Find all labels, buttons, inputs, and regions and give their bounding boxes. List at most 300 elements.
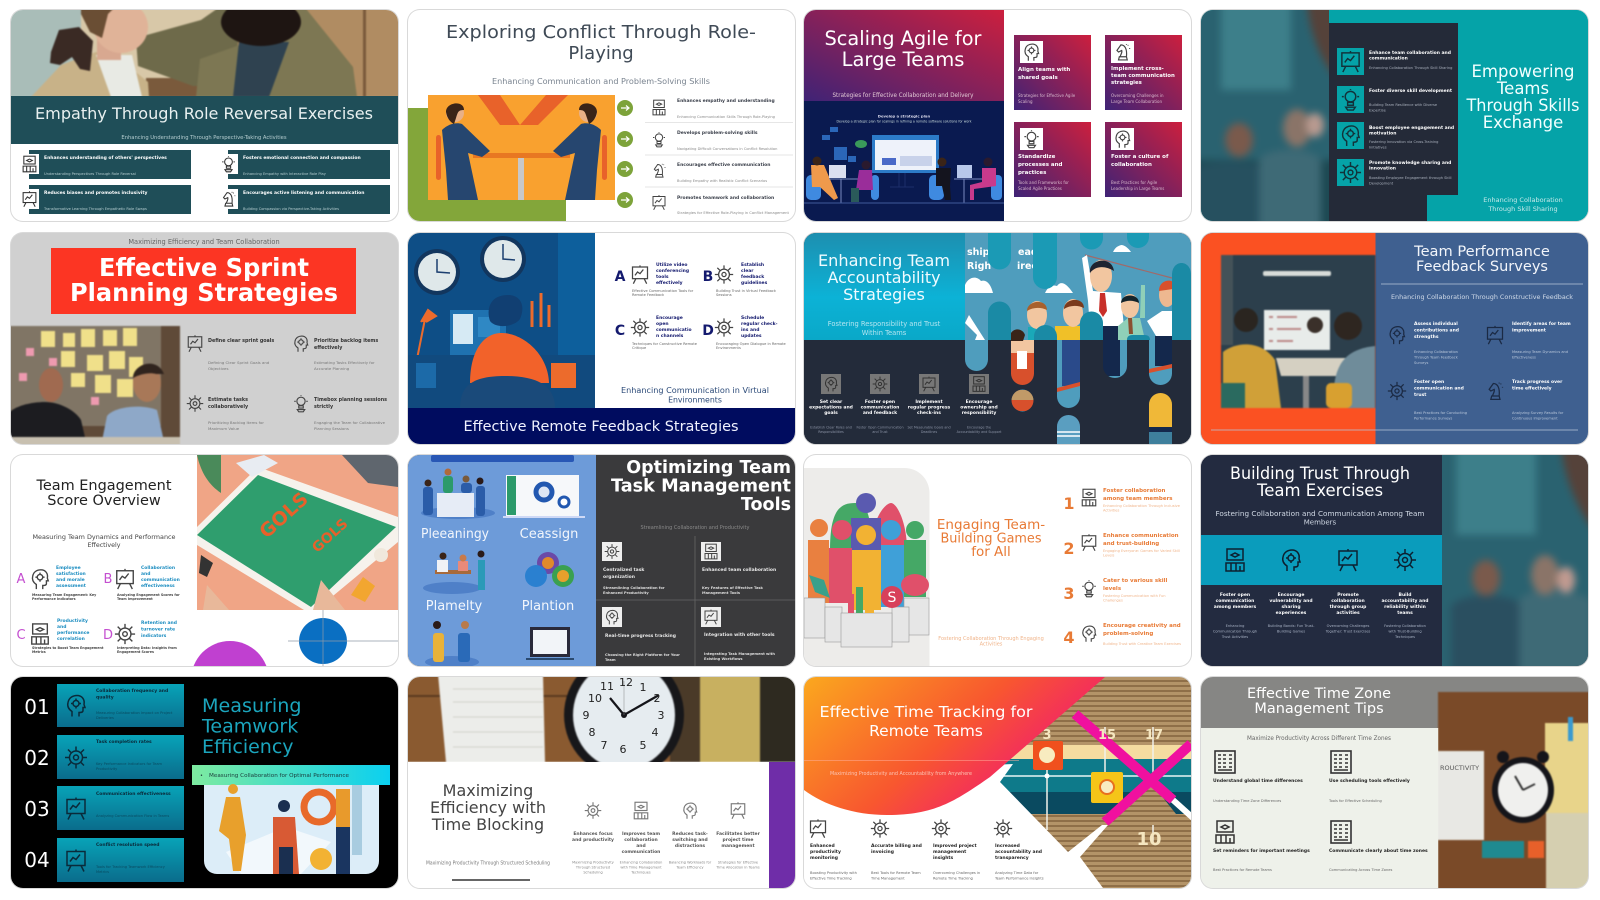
item 1: [1063, 488, 1181, 513]
photo: two people, comforting hand on shoulder: [7, 0, 402, 97]
photo: timeline board on wood: 17: [1145, 728, 1163, 743]
item 3: [1337, 122, 1454, 150]
illustration: strategic plan meeting: Develop a strategic plan for scalings in refining a remote software solutions for work: [837, 120, 972, 124]
photo: timeline board on wood: [990, 677, 1193, 888]
purple bar: [768, 762, 794, 888]
item 1: Understanding Perspectives Through Role Reversal: [44, 172, 136, 176]
item 4: accountability and: [995, 849, 1042, 855]
item 3: Best Practices for Conducting: [1414, 410, 1467, 414]
item 2: Accurate Planning: [314, 366, 350, 370]
illustration: celebrating team through pill-shaped windows: irect: [1017, 260, 1042, 272]
item 1: Through Team Feedback: [1413, 355, 1459, 359]
item 3: [907, 374, 951, 434]
benefit list: Develops problem-solving skills: [676, 130, 757, 136]
item 1: Enhancing Collaboration Through Skill Sharing: [1369, 66, 1452, 70]
item 1: Scheduling: [583, 870, 602, 874]
item 4: Accountability and Support: [957, 430, 1002, 434]
item 4: Communicate clearly about time zones: [1329, 848, 1428, 854]
item 1: Foster collaboration: [1103, 488, 1166, 494]
title: Score Overview: [47, 493, 161, 509]
item 2: Measuring Team Dynamics and: [1512, 350, 1568, 354]
item 4: Boosting Employee Engagement through Skill: [1369, 176, 1451, 180]
item 4: strictly: [314, 404, 334, 410]
item 3: collaboration: [1331, 598, 1365, 604]
item 4: time effectively: [1512, 385, 1552, 391]
item 2: Tools for Effective Scheduling: [1328, 799, 1382, 803]
item 2: Enhancing Empathy with Interactive Role Play: [243, 172, 327, 176]
item 4: Building Compassion via Perspective-Taking Activities: [243, 207, 339, 211]
item 2: Time Management: [870, 876, 905, 880]
item B: effectiveness: [141, 583, 175, 589]
grid lines: [596, 536, 794, 666]
title: Planning Strategies: [70, 278, 338, 306]
item D: ins and: [740, 326, 759, 332]
item 4: [700, 607, 775, 661]
rising teal pills: [988, 262, 1191, 340]
title: Remote Teams: [869, 722, 983, 740]
item 03: Analyzing Communication Flow in Teams: [96, 814, 169, 818]
item 2: [700, 542, 776, 595]
item 2: Effectiveness: [1512, 355, 1536, 359]
panel: Engaging Team-Building Games for All: [804, 455, 1191, 666]
item 3: management: [933, 849, 967, 855]
item 4: Development: [1369, 182, 1394, 186]
illustration: analysts with target chart: [204, 784, 379, 874]
title: Exchange: [1483, 113, 1563, 132]
item C: Metrics: [32, 650, 46, 654]
item B: Team Improvement: [117, 597, 153, 601]
arrows: [616, 100, 632, 208]
illustration: goals board on a desk: [197, 455, 398, 610]
item 4: [1489, 378, 1564, 420]
item D: Schedule: [740, 314, 764, 320]
title band: [408, 408, 794, 444]
item 4: [1337, 159, 1451, 186]
item 02: [24, 735, 184, 779]
item 2: communication: [621, 849, 660, 855]
item 4: Increased: [995, 843, 1020, 849]
item 1: Communication Through: [1213, 630, 1257, 634]
item 4: Encourages active listening and communication: [243, 190, 364, 196]
item 1: Through Structured: [574, 866, 610, 870]
item 1: [1337, 48, 1452, 75]
item 4: [1063, 623, 1181, 647]
subtitle: Activities: [980, 642, 1003, 648]
item 2: [295, 336, 378, 370]
item 2: improvement: [1512, 327, 1547, 333]
item 2: Accurate billing and: [871, 843, 922, 849]
title: for All: [971, 544, 1011, 560]
illustration: strategic plan meeting: [804, 101, 1004, 221]
tile 4: Leadership in Large Teams: [1111, 186, 1164, 191]
blurred business photo: [1181, 0, 1351, 240]
item B: Establish: [740, 262, 764, 268]
item C: performance: [57, 630, 89, 636]
item 2: 2: [1063, 539, 1075, 558]
item 3: Set reminders for important meetings: [1213, 848, 1310, 854]
title: Building Trust Through: [1230, 464, 1410, 483]
item 3: Best Practices for Remote Teams: [1213, 868, 1272, 872]
item A: assessment: [56, 583, 87, 589]
title: Large Teams: [842, 48, 964, 71]
subtitle: Fostering Collaboration and Communication Among Team: [1216, 510, 1425, 518]
item 1: 1: [1063, 494, 1075, 513]
item A: [614, 262, 693, 296]
item B: Collaboration: [141, 565, 175, 571]
title: Team Exercises: [1256, 481, 1383, 500]
item D: [702, 314, 786, 350]
item B: [702, 262, 776, 296]
title: Optimizing Team: [626, 458, 790, 478]
item A: A: [614, 268, 625, 284]
subtitle: Enhancing Communication in Virtual: [620, 386, 768, 394]
item 2: Enhance communication: [1103, 533, 1179, 539]
item 1: [1213, 549, 1257, 639]
item 4: [219, 185, 390, 214]
item 3: Overcoming Challenges in: [933, 871, 980, 875]
item D: updates: [740, 332, 761, 338]
title band: [11, 96, 398, 144]
item 1: Centralized task: [602, 567, 645, 573]
benefit list: [644, 98, 792, 215]
item 3: communication and: [1414, 385, 1464, 391]
illustration: celebrating team through pill-shaped windows: Righ: [967, 260, 991, 272]
item A: A: [17, 572, 26, 587]
item 3: Maximum Value: [208, 426, 240, 430]
item 2: Techniques: [630, 870, 650, 874]
dark content block: [1201, 455, 1442, 666]
item B: [104, 565, 180, 601]
item 4: [715, 802, 760, 870]
title: Exploring Conflict Through Role-: [446, 22, 756, 43]
item 3: Deadlines: [921, 430, 937, 434]
item 3: Fostering Communication with Fun: [1103, 594, 1165, 598]
subtitle: Fostering Collaboration Through Engaging: [938, 636, 1044, 642]
item C: Critique: [632, 346, 646, 350]
item B: Building Trust in Virtual Feedback: [716, 288, 776, 292]
subtitle: Measuring Team Dynamics and Performance: [32, 534, 176, 541]
tile 4: [1105, 122, 1182, 197]
clock hands and numerals: 11: [600, 680, 614, 693]
tile 1: Scaling: [1018, 99, 1033, 104]
benefit list: Strategies for Effective Role-Playing in Conflict Management: [676, 211, 789, 215]
item 1: productivity: [810, 849, 841, 855]
item 3: through group: [1330, 604, 1367, 610]
item D: Environments: [716, 346, 740, 350]
item B: B: [702, 268, 713, 284]
item 1: monitoring: [810, 855, 838, 861]
item 1: [20, 150, 191, 179]
photo: sticky note wall and two men: [8, 326, 180, 446]
title: Effective Remote Feedback Strategies: [463, 418, 738, 434]
item 1: Boosting Productivity with: [810, 871, 857, 875]
item 1: [809, 374, 853, 434]
teal background block: [1329, 10, 1588, 221]
dark clean edge for photo: [1201, 728, 1438, 888]
item 3: Improved project: [933, 843, 977, 849]
item 3: Promote: [1337, 592, 1359, 598]
item 2: Management Tools: [702, 591, 740, 595]
item C: communicatio: [656, 326, 691, 332]
clock hands and numerals: 5: [639, 739, 646, 752]
benefit list: Navigating Difficult Conversations in Conflict Resolution: [676, 147, 777, 151]
subtitle: Streamlining Collaboration and Productivity: [640, 525, 749, 531]
tile 4: Best Practices for Agile: [1111, 180, 1158, 185]
clock hands and numerals: 9: [582, 709, 589, 722]
item 1: [188, 335, 274, 370]
panel: Empathy Through Role Reversal Exercises: [11, 10, 398, 221]
item 02: Productivity: [96, 767, 118, 771]
item 3: regular progress: [908, 404, 951, 410]
item 1: Understanding Time Zone Differences: [1213, 799, 1281, 803]
item 3: Reduces biases and promotes inclusivity: [44, 190, 147, 196]
item 3: [187, 395, 264, 430]
top pills: [988, 232, 1149, 288]
illustration: goals board on a desk: GOLS: [309, 516, 351, 556]
item B: feedback: [740, 274, 765, 280]
item 3: Overcoming Challenges: [1327, 624, 1370, 628]
title: Efficiency: [202, 736, 294, 758]
item 4: [994, 819, 1044, 880]
illustration panel: Plantion: [521, 599, 574, 614]
item B: Analyzing Engagement Scores for: [117, 593, 180, 597]
item A: Employee: [56, 565, 81, 571]
item 1: Activities: [1103, 508, 1120, 512]
tile 3: Tools and Frameworks for: [1017, 180, 1069, 185]
header block: [804, 232, 965, 340]
item D: turnover rate: [141, 626, 175, 632]
underline: [452, 879, 530, 881]
item 2: Use scheduling tools effectively: [1329, 778, 1410, 784]
item D: Engagement Scores: [117, 650, 154, 654]
item 2: [1328, 751, 1410, 803]
item 1: Assess individual: [1414, 320, 1458, 326]
title: Accountability: [828, 268, 940, 286]
item 2: Levels: [1103, 554, 1114, 558]
item C: C: [16, 628, 26, 643]
item 1: Trust Activities: [1221, 635, 1248, 639]
subtitle: Maximizing Productivity Through Structured Scheduling: [426, 860, 550, 866]
item 1: among team members: [1103, 496, 1173, 502]
item 2: Foster Open Communication: [856, 425, 904, 429]
item 4: Building Trust with Creative Team Exercises: [1103, 642, 1181, 646]
clock hands and numerals: 3: [657, 709, 664, 722]
item 2: Enhancing Collaboration: [619, 860, 662, 864]
item 2: Expertise: [1369, 108, 1387, 112]
item 1: Define clear sprint goals: [208, 338, 274, 344]
item 1: expectations and: [809, 404, 853, 410]
clock hands and numerals: 7: [600, 739, 607, 752]
item 2: Building Bonds: Fun Trust-: [1268, 624, 1315, 628]
item A: Remote Feedback: [632, 292, 665, 296]
item 02: 02: [24, 746, 50, 770]
photo: clock and notepad on wood: [404, 653, 798, 777]
item A: effectively: [656, 280, 682, 286]
item 4: responsibility: [962, 410, 996, 416]
item 1: strengths: [1414, 334, 1439, 340]
title: Empathy Through Role Reversal Exercises: [35, 104, 373, 123]
item 2: [219, 150, 390, 179]
header block: [804, 10, 1004, 101]
illustration panel: Ceassign: [519, 527, 578, 542]
benefit list: Enhances empathy and understanding: [676, 98, 774, 104]
item 04: 04: [24, 848, 50, 872]
item 02: Key Performance Indicators for Team: [96, 762, 163, 766]
item D: D: [103, 628, 113, 643]
subtitle: Members: [1304, 518, 1337, 526]
photo: alarm clock on wood desk: [1438, 692, 1591, 891]
item A: [17, 565, 97, 601]
item 2: Building Team Resilience with Diverse: [1369, 103, 1438, 107]
item 1: communication: [1369, 56, 1408, 62]
item A: Performance Indicators: [32, 597, 76, 601]
title: Scaling Agile for: [824, 27, 982, 50]
subtitle: Enhancing Collaboration Through Constructive Feedback: [1391, 292, 1573, 300]
item 1: Enhancing: [1226, 624, 1244, 628]
panel: Team Engagement Score Overview: [11, 455, 398, 666]
item 2: effectively: [314, 344, 343, 350]
gray header: [1201, 677, 1588, 728]
item B: B: [104, 572, 112, 587]
item 2: experiences: [1276, 610, 1307, 616]
photo caption text: ROUCTIVITY: [1440, 764, 1479, 772]
item C: correlation: [57, 636, 85, 642]
item 4: Track progress over: [1512, 378, 1563, 384]
item D: [103, 620, 177, 654]
illustration: remote worker at desk: [408, 232, 594, 408]
title: Task Management: [610, 476, 790, 496]
item 3: Initiatives: [1369, 146, 1387, 150]
item 4: Fostering Collaboration: [1384, 624, 1426, 628]
item 4: Facilitates better: [716, 831, 760, 837]
item 4: Planning Sessions: [314, 426, 349, 430]
photo: timeline board on wood: 10: [1136, 829, 1162, 850]
item 4: with Trust-Building: [1388, 630, 1422, 634]
photo: timeline board on wood: 3: [1042, 728, 1052, 743]
item 2: [870, 819, 922, 880]
item 4: transparency: [995, 855, 1029, 861]
item 3: Challenges: [1103, 598, 1123, 602]
illustration: celebrating team through pill-shaped windows: ead T: [1018, 246, 1048, 258]
tile 4: collaboration: [1111, 162, 1152, 168]
item 2: Engaging Everyone: Games for Varied Skill: [1103, 549, 1180, 553]
photo: timeline board on wood: 15: [1098, 728, 1116, 743]
item 4: Engaging the Team for Collaborative: [314, 420, 386, 424]
item 2: Foster open: [865, 398, 895, 404]
item 4: ownership and: [960, 404, 998, 410]
item 4: Time Allocation in Teams: [715, 866, 759, 870]
item 1: [1213, 751, 1303, 803]
item 01: Deliveries: [96, 716, 114, 720]
item 4: Continuous Improvement: [1512, 416, 1558, 420]
item 1: Foster open: [1220, 592, 1250, 598]
item B: guidelines: [740, 280, 767, 286]
item 3: [1388, 378, 1467, 420]
subtitle bar: [192, 765, 390, 785]
clock hands and numerals: 10: [588, 692, 602, 705]
item 3: Team: [604, 658, 615, 662]
item 3: Choosing the Right Platform for Your: [604, 653, 680, 657]
item 1: Responsibilities: [818, 430, 844, 434]
green block: [408, 108, 566, 221]
subtitle: Strategies for Effective Collaboration and Delivery: [832, 91, 974, 99]
item 3: Boost employee engagement and: [1369, 125, 1454, 131]
title: Team Performance: [1413, 242, 1550, 260]
item 3: switching and: [672, 837, 707, 843]
item 4: Integrating Task Management with: [704, 652, 775, 656]
item A: and morale: [56, 577, 85, 583]
item 3: Implement: [915, 398, 943, 404]
item 4: teams: [1397, 610, 1413, 616]
item 4: Analyzing Time Data for: [995, 871, 1039, 875]
item 3: Cater to various skill: [1103, 578, 1168, 584]
illustration: colorful figures on podiums: S: [888, 590, 897, 606]
orange block: [1201, 232, 1376, 444]
tile 2: Implement cross-: [1111, 66, 1164, 72]
item 03: 03: [24, 797, 50, 821]
title: Maximizing: [442, 781, 533, 800]
title: Effective Time Tracking for: [820, 703, 1033, 721]
illustration: colorful figures on podiums: [804, 468, 930, 666]
item 3: [1325, 549, 1370, 634]
item 3: check-ins: [917, 410, 941, 416]
item 1: Maximizing Productivity: [572, 860, 613, 864]
item 3: collaboratively: [208, 404, 249, 410]
item C: Techniques for Constructive Remote: [630, 342, 697, 346]
red banner: [51, 248, 356, 314]
item 3: [932, 819, 980, 880]
illustration panel: Pleeaningy: [420, 527, 489, 542]
item 1: goals: [824, 410, 838, 416]
item 4: accountability and: [1381, 598, 1429, 604]
tile 1: Strategies for Effective Agile: [1018, 93, 1076, 98]
item 3: Real-time progress tracking: [604, 633, 675, 639]
item 3: Estimate tasks: [208, 396, 248, 402]
panel: Building Trust Through Team Exercises: [1201, 455, 1588, 666]
photo: meeting room: [1221, 254, 1376, 408]
title: Building Games: [940, 530, 1042, 546]
item 3: Performance Surveys: [1414, 416, 1452, 420]
item A: satisfaction: [56, 571, 86, 577]
item 1: Set clear: [820, 398, 843, 404]
item 4: management: [721, 843, 755, 849]
panel: Effective Time Zone Management Tips: [1201, 677, 1588, 888]
title: Feedback Surveys: [1416, 258, 1548, 274]
item 2: vulnerability and: [1269, 598, 1313, 604]
item D: Encouraging Open Dialogue in Remote: [716, 342, 786, 346]
tile 2: [1105, 35, 1182, 110]
panel: Optimizing Team Task Management Tools: [408, 455, 794, 666]
blue circle: [299, 618, 347, 664]
tile 2: strategies: [1111, 80, 1142, 86]
item 2: and Trust: [872, 430, 888, 434]
item 1: [602, 542, 664, 595]
item 1: Enhanced: [810, 843, 835, 849]
item 1: contributions and: [1414, 327, 1459, 333]
clock hands and numerals: [582, 676, 664, 756]
item 4: Encourage creativity and: [1103, 623, 1181, 629]
item 4: Encourage the: [967, 425, 991, 429]
divider lines: [1211, 284, 1583, 430]
item 1: Enhancing Collaboration: [1414, 350, 1458, 354]
item 4: innovation: [1369, 166, 1396, 172]
item 3: [20, 185, 191, 214]
item 4: Communicating Across Time Zones: [1329, 868, 1392, 872]
subtitle: Enhancing Understanding Through Perspective-Taking Activities: [121, 135, 287, 141]
title: Effective Time Zone: [1247, 686, 1391, 702]
item 4: Team Performance Insights: [994, 876, 1044, 880]
item 3: levels: [1103, 586, 1122, 592]
